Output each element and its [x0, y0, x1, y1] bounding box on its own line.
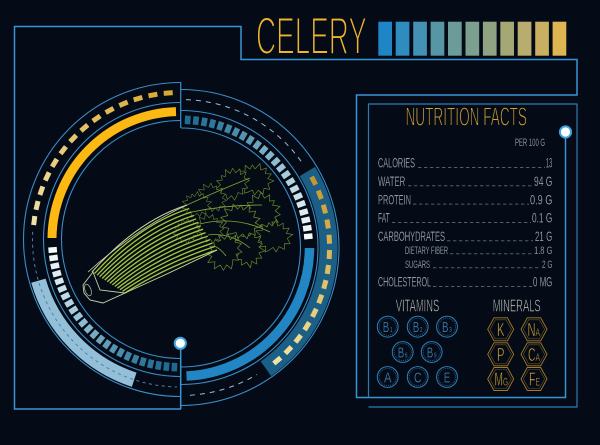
- row: water: [378, 173, 552, 189]
- row: dietary fiber: 1.8 G: [534, 245, 552, 257]
- heading: vitamins: VITAMINS: [396, 296, 439, 316]
- bright blue arc band: [186, 248, 310, 376]
- row: carbohydrates: 21 G: [535, 228, 552, 244]
- row: calories: CALORIES: [378, 155, 415, 171]
- vitamin badges: C: [414, 370, 422, 386]
- tick arc: upper right: [187, 116, 312, 237]
- row: cholesterol: 0 MG: [533, 274, 552, 290]
- dashed thin arcs: right: [186, 100, 302, 395]
- celery base: [83, 272, 125, 303]
- yellow arc band: [52, 112, 176, 238]
- yellow dashed arc: [34, 93, 173, 225]
- connector node: ring: [175, 338, 186, 349]
- mineral badges: N: [528, 320, 536, 340]
- vitamin badges: B: [383, 319, 389, 336]
- row: carbohydrates: CARBOHYDRATES: [378, 228, 445, 244]
- dark blue arc band: [266, 172, 329, 369]
- row: cholesterol: [378, 274, 552, 290]
- row: dietary fiber: [405, 245, 552, 257]
- yellow dashes on dark blue band: [274, 177, 330, 364]
- vitamin badges: A: [384, 370, 391, 386]
- vitamin badges: 9: [434, 352, 437, 359]
- celery base core: [83, 283, 93, 297]
- dashed thin arc: lower left: [32, 232, 177, 387]
- vitamin badges: B: [413, 319, 419, 336]
- celery stalks: [88, 205, 217, 303]
- row: protein: [378, 191, 552, 207]
- row: sugars: SUGARS: [405, 259, 430, 271]
- colour swatch bar: [378, 22, 566, 56]
- mineral badges: E: [536, 376, 540, 388]
- vitamin badges: 6: [405, 352, 408, 359]
- vitamin badges: 2: [420, 327, 423, 334]
- heading: minerals: MINERALS: [493, 296, 541, 316]
- row: fat: 0.1 G: [532, 210, 552, 226]
- vitamin badges: B: [442, 319, 449, 336]
- mineral badges: K: [497, 320, 504, 340]
- text: 13: [546, 155, 552, 171]
- row: dietary fiber: DIETARY FIBER: [405, 245, 448, 257]
- pale blue arc band: [38, 281, 134, 380]
- title: celery: CELERY: [256, 7, 367, 66]
- row: sugars: 2 G: [542, 259, 552, 271]
- vitamin badges: 1: [390, 327, 393, 334]
- vitamin badges: B: [398, 344, 404, 361]
- mineral badges: P: [497, 345, 504, 365]
- illustration: celery: [83, 157, 295, 303]
- panel: nutrition facts: [378, 104, 552, 290]
- mineral badges: A: [536, 327, 540, 339]
- row: calories: [378, 155, 552, 171]
- row: cholesterol: CHOLESTEROL: [378, 274, 431, 290]
- mineral badges: A: [536, 352, 540, 364]
- connector node: panel: [560, 126, 571, 138]
- row: sugars: [405, 259, 552, 271]
- vitamin badges: 3: [449, 327, 452, 334]
- row: protein: 0.9 G: [530, 191, 552, 207]
- tick arc: lower left: [48, 250, 175, 371]
- row: fat: [378, 210, 552, 226]
- row: water: 94 G: [534, 173, 552, 189]
- mineral badges: G: [503, 376, 508, 388]
- row: water: WATER: [378, 173, 405, 189]
- mineral badges: F: [529, 370, 536, 390]
- vitamin badges: [377, 316, 457, 387]
- row: protein: PROTEIN: [378, 191, 411, 207]
- gauge ring: right half arcs: [181, 90, 339, 406]
- celery leaf veins: [187, 178, 270, 256]
- celery leaves: [170, 157, 295, 278]
- gauge ring: left half arcs: [24, 82, 181, 396]
- vitamin badges: B: [427, 344, 433, 361]
- per 100 g: PER 100 G: [515, 137, 545, 149]
- mineral badges: M: [494, 370, 503, 390]
- vitamin badges: E: [444, 370, 450, 386]
- mineral badges: [488, 318, 547, 390]
- row: fat: FAT: [378, 210, 390, 226]
- mineral badges: C: [528, 345, 536, 365]
